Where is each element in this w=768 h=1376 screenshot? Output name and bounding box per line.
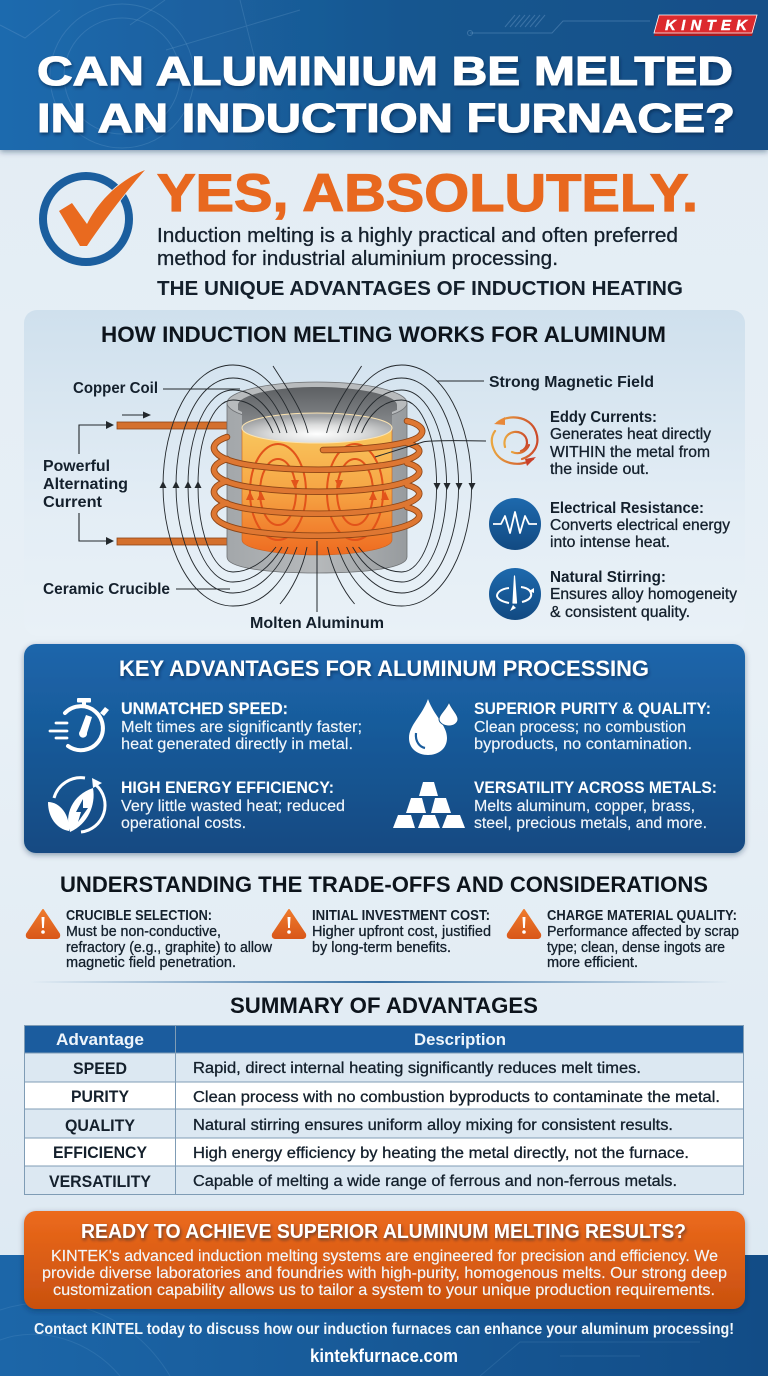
- consideration: crucible selection: refractory (e.g., graphite) to allow: [66, 940, 273, 956]
- table: summary of advantages: [24, 1025, 744, 1195]
- row: efficiency: High energy efficiency by heating the metal directly, not the furnace.: [193, 1145, 689, 1162]
- icon: metal ingots: [393, 782, 465, 828]
- text: natural stirring: Natural Stirring:: [550, 569, 666, 586]
- title: [37, 48, 735, 141]
- consideration: initial investment: INITIAL INVESTMENT COST:: [312, 908, 490, 924]
- row: versatility: [49, 1173, 677, 1191]
- subheading: unique advantages: THE UNIQUE ADVANTAGES OF INDUCTION HEATING: [157, 278, 683, 300]
- text: electrical resistance: [550, 500, 730, 551]
- label: powerful alternating current: Current: [43, 494, 103, 511]
- molten aluminum: [242, 413, 392, 555]
- intro text: method for industrial aluminium processing.: [157, 248, 558, 270]
- magnetic field lines: [160, 365, 476, 606]
- crucible: [227, 382, 407, 573]
- label: molten aluminum: Molten Aluminum: [250, 615, 384, 632]
- consideration: initial investment: by long-term benefits.: [312, 940, 451, 956]
- text: superior purity: byproducts, no contamination.: [474, 736, 692, 753]
- text: high energy efficiency: HIGH ENERGY EFFICIENCY:: [121, 779, 334, 797]
- logo: KINTEK: KINTEK: [665, 17, 748, 34]
- text: electrical resistance: Converts electrical energy: [550, 517, 730, 534]
- heading: trade-offs: UNDERSTANDING THE TRADE-OFFS AND CONSIDERATIONS: [60, 872, 708, 897]
- icon: electrical resistance: [489, 498, 541, 550]
- text: unmatched speed: heat generated directly in metal.: [121, 736, 353, 753]
- cta body: customization capability allows us to tailor a system to your unique production requirements.: [53, 1282, 715, 1299]
- label: strong magnetic field: Strong Magnetic Field: [489, 374, 654, 391]
- text: eddy currents: Generates heat directly: [550, 426, 711, 443]
- consideration: initial investment: [273, 908, 491, 956]
- row: quality: QUALITY: [65, 1117, 135, 1135]
- icon: droplets: [409, 699, 458, 755]
- intro text: [157, 225, 678, 270]
- header band: [0, 0, 768, 150]
- panel: call to action: [24, 1211, 745, 1309]
- text: eddy currents: the inside out.: [550, 461, 649, 478]
- row: purity: Clean process with no combustion byproducts to contaminate the metal.: [193, 1089, 720, 1106]
- text: electrical resistance: into intense heat.: [550, 534, 670, 551]
- consideration: crucible selection: [27, 908, 273, 971]
- logo: KINTEK: [654, 15, 757, 36]
- panel: key advantages: [24, 644, 745, 853]
- table header: Description: [414, 1030, 506, 1049]
- text: superior purity: SUPERIOR PURITY & QUALITY:: [474, 700, 711, 718]
- icon: leaf energy: [48, 778, 105, 832]
- text: eddy currents: WITHIN the metal from: [550, 444, 710, 461]
- row: speed: SPEED: [73, 1060, 127, 1078]
- consideration: crucible selection: magnetic field penetration.: [66, 955, 236, 971]
- row: speed: Rapid, direct internal heating significantly reduces melt times.: [193, 1060, 641, 1077]
- icon: natural stirring: [489, 568, 541, 620]
- title: CAN ALUMINIUM BE MELTED: [37, 48, 733, 94]
- label: powerful alternating current: [43, 412, 151, 545]
- table header: [56, 1030, 506, 1049]
- consideration: charge material: type; clean, dense ingots are: [547, 940, 725, 956]
- title: IN AN INDUCTION FURNACE?: [37, 95, 735, 141]
- power leads: [117, 422, 227, 545]
- icon: stopwatch: [50, 698, 109, 750]
- text: unmatched speed: Melt times are significantly faster;: [121, 719, 362, 736]
- label: molten aluminum: [250, 541, 384, 632]
- icon: warning: [273, 910, 305, 938]
- icon: eddy currents spiral: [492, 417, 537, 466]
- text: high energy efficiency: [121, 779, 345, 832]
- headline: yes absolutely: YES, ABSOLUTELY.: [157, 164, 698, 223]
- text: versatility: VERSATILITY ACROSS METALS:: [474, 779, 717, 797]
- panel heading: KEY ADVANTAGES FOR ALUMINUM PROCESSING: [119, 656, 649, 681]
- footer band: [0, 1255, 768, 1376]
- cta body: [42, 1248, 727, 1299]
- text: superior purity: Clean process; no combustion: [474, 719, 686, 736]
- cta heading: READY TO ACHIEVE SUPERIOR ALUMINUM MELTING RESULTS?: [81, 1220, 686, 1243]
- row: versatility: VERSATILITY: [49, 1173, 151, 1191]
- panel heading: HOW INDUCTION MELTING WORKS FOR ALUMINUM: [101, 322, 666, 347]
- icon: check mark badge: [43, 170, 145, 262]
- eddy current loops: [246, 444, 389, 540]
- text: unmatched speed: UNMATCHED SPEED:: [121, 700, 288, 718]
- consideration: crucible selection: Must be non-conductive,: [66, 924, 221, 940]
- text: natural stirring: & consistent quality.: [550, 604, 690, 621]
- intro text: Induction melting is a highly practical and often preferred: [157, 225, 678, 247]
- text: eddy currents: [550, 409, 711, 478]
- consideration: charge material: [508, 908, 739, 971]
- text: versatility: steel, precious metals, and more.: [474, 815, 707, 832]
- cta body: provide diverse laboratories and foundries with high-purity, homogenous melts. Our strong deep: [42, 1265, 727, 1282]
- text: natural stirring: [550, 569, 737, 621]
- panel: how induction melting works: [24, 310, 745, 636]
- row: efficiency: EFFICIENCY: [53, 1144, 147, 1162]
- consideration: charge material: more efficient.: [547, 955, 638, 971]
- table header: Advantage: [56, 1030, 144, 1049]
- text: high energy efficiency: operational costs.: [121, 815, 246, 832]
- label: ceramic crucible: Ceramic Crucible: [43, 581, 170, 598]
- row: speed: [73, 1060, 641, 1078]
- row: efficiency: [53, 1144, 689, 1162]
- text: versatility: [474, 779, 717, 832]
- diagram: induction furnace: [43, 365, 654, 632]
- website: kintekfurnace.com: [310, 1346, 458, 1366]
- consideration: initial investment: Higher upfront cost, justified: [312, 924, 491, 940]
- consideration: charge material: CHARGE MATERIAL QUALITY:: [547, 908, 737, 924]
- text: superior purity: [474, 700, 711, 753]
- cta body: KINTEK's advanced induction melting systems are engineered for precision and efficiency. We: [51, 1248, 718, 1265]
- text: versatility: Melts aluminum, copper, brass,: [474, 798, 695, 815]
- copper coil: [214, 421, 422, 536]
- row: purity: PURITY: [71, 1088, 129, 1106]
- heading: summary: SUMMARY OF ADVANTAGES: [230, 993, 538, 1018]
- consideration: charge material: Performance affected by scrap: [547, 924, 739, 940]
- text: unmatched speed: [121, 700, 362, 753]
- text: natural stirring: Ensures alloy homogeneity: [550, 586, 737, 603]
- label: copper coil: Copper Coil: [73, 380, 158, 397]
- text: eddy currents: Eddy Currents:: [550, 409, 657, 426]
- row: quality: Natural stirring ensures uniform alloy mixing for consistent results.: [193, 1117, 673, 1134]
- icon: warning: [27, 910, 59, 938]
- label: powerful alternating current: Powerful: [43, 458, 110, 475]
- label: powerful alternating current: Alternating: [43, 476, 128, 493]
- text: high energy efficiency: Very little wasted heat; reduced: [121, 798, 345, 815]
- icon: warning: [508, 910, 540, 938]
- consideration: crucible selection: CRUCIBLE SELECTION:: [66, 908, 212, 924]
- row: versatility: Capable of melting a wide range of ferrous and non-ferrous metals.: [193, 1173, 677, 1190]
- text: electrical resistance: Electrical Resistance:: [550, 500, 704, 517]
